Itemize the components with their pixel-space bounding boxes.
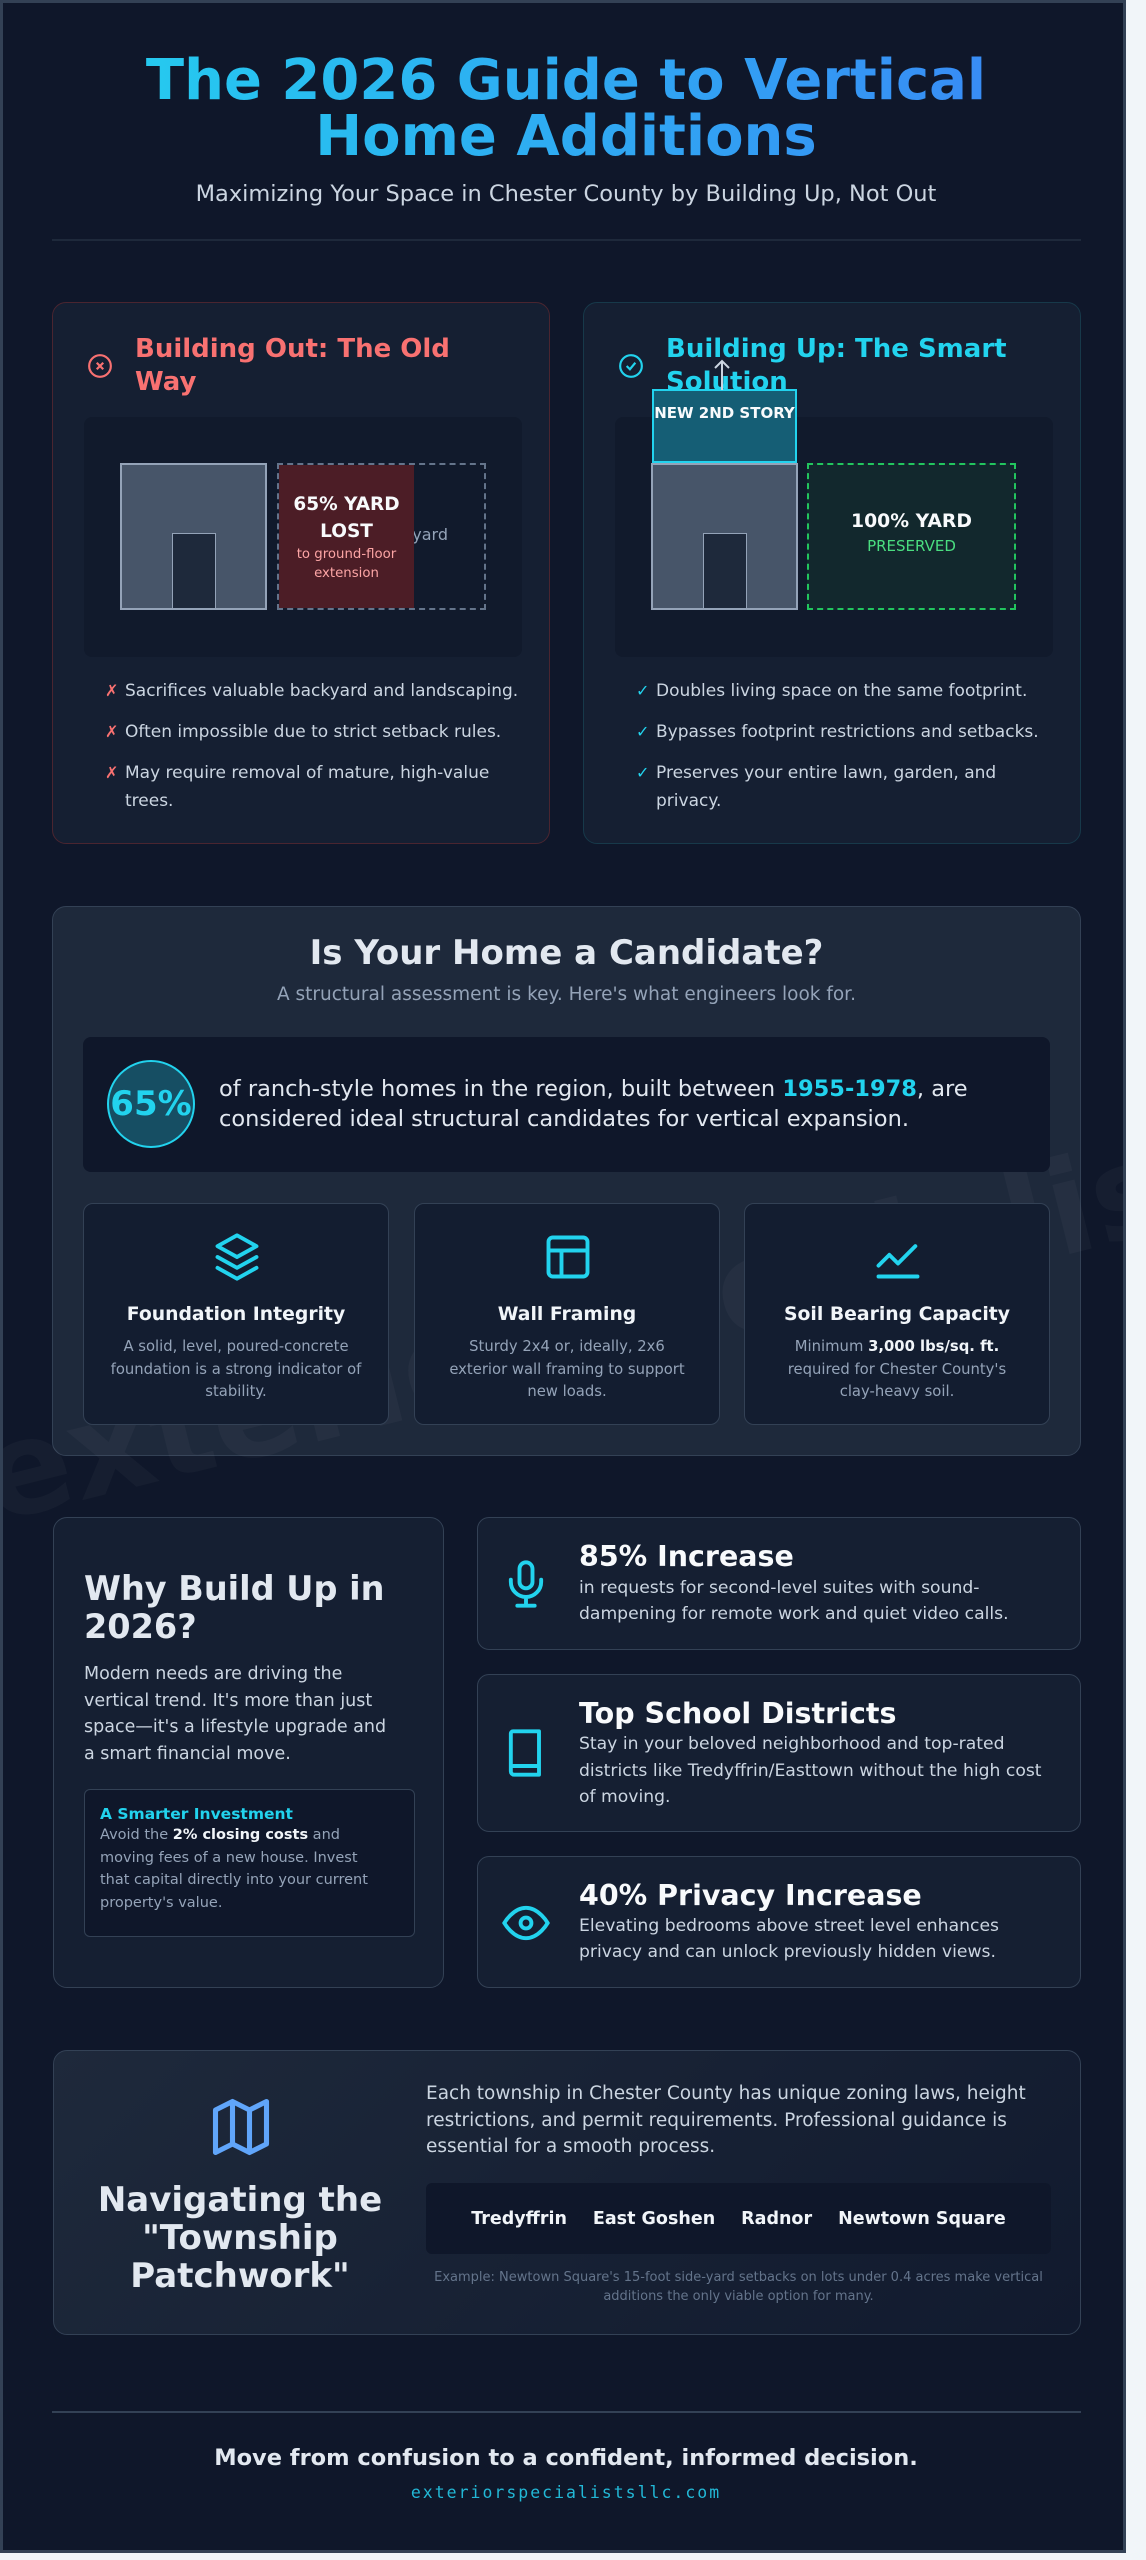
yard preserved: PRESERVED — [867, 537, 956, 555]
yard with lost portion: to ground-floor — [297, 547, 396, 562]
card: soil: Minimum 3,000 lbs/sq. ft. required for Chester County's clay-heavy soil. — [788, 1338, 1006, 1400]
township list — [426, 2183, 1051, 2254]
card: privacy — [477, 1856, 1081, 1988]
title — [3, 53, 1129, 165]
icon: eye — [502, 1906, 550, 1940]
stat text: of ranch-style homes in the region, built between 1955-1978, are considered ideal structural candidates for vertical expansion. — [219, 1076, 968, 1132]
panel: building out: ✗ — [105, 722, 118, 741]
title: Home Additions — [315, 104, 817, 169]
callout: smarter investment: Avoid the 2% closing costs and moving fees of a new house. Invest that capital directly into your current property's value. — [100, 1827, 368, 1910]
panel: why build up — [53, 1517, 444, 1988]
arrow: up — [714, 360, 730, 390]
paragraph: space—it's a lifestyle upgrade and — [84, 1717, 386, 1737]
subtitle: Maximizing Your Space in Chester County by Building Up, Not Out — [196, 181, 936, 207]
card: wall framing: Wall Framing — [498, 1304, 636, 1325]
township list: Radnor — [741, 2208, 812, 2228]
township list: Newtown Square — [838, 2208, 1006, 2228]
house — [120, 463, 267, 610]
heading: candidate: Is Your Home a Candidate? — [310, 933, 823, 973]
yard with lost portion: 65% YARD — [293, 494, 400, 515]
panel: building out: Often impossible due to strict setback rules. — [125, 722, 501, 742]
yard with lost portion: Backyard — [374, 525, 448, 544]
panel: building out: ✗ — [105, 763, 118, 782]
stat box: 65% — [83, 1037, 1050, 1172]
house — [651, 463, 798, 610]
yard with lost portion — [277, 463, 486, 610]
subheading: A structural assessment is key. Here's what engineers look for. — [277, 984, 856, 1005]
yard with lost portion: LOST — [320, 521, 373, 542]
card: foundation: Foundation Integrity — [127, 1304, 345, 1325]
township list: Tredyffrin — [471, 2208, 567, 2228]
heading: building out: Building Out: The Old Way — [135, 334, 450, 397]
title: The 2026 Guide to Vertical — [146, 48, 986, 113]
icon: circle check — [619, 354, 643, 378]
example note: Example: Newtown Square's 15-foot side-yard setbacks on lots under 0.4 acres make vertical additions the only viable option for many. — [434, 2270, 1043, 2304]
panel: township patchwork — [53, 2050, 1081, 2335]
icon: map — [212, 2098, 270, 2156]
footer url: exteriorspecialistsllc.com — [411, 2483, 721, 2502]
callout: smarter investment: A Smarter Investment — [100, 1805, 293, 1823]
diagram: second story — [615, 417, 1053, 657]
card: privacy: Elevating bedrooms above street level enhances privacy and can unlock previously hidden views. — [579, 1916, 999, 1962]
card: 85% increase — [477, 1517, 1081, 1650]
stat circle — [107, 1060, 195, 1148]
icon: circle x — [88, 354, 112, 378]
panel: building out: May require removal of mature, high-value trees. — [125, 763, 489, 811]
paragraph: a smart financial move. — [84, 1744, 291, 1764]
card: schools — [477, 1674, 1081, 1832]
yard with lost portion: extension — [314, 566, 379, 581]
new 2nd story — [652, 389, 797, 463]
footer tagline: Move from confusion to a confident, informed decision. — [214, 2445, 918, 2471]
panel: building up: ✓ — [636, 722, 649, 741]
card: privacy: 40% Privacy Increase — [579, 1879, 922, 1912]
card: schools: Top School Districts — [579, 1697, 896, 1730]
panel: candidate — [52, 906, 1081, 1456]
bullets: cons: Sacrifices valuable backyard and landscaping. — [125, 681, 518, 701]
icon: mic — [508, 1560, 544, 1608]
bullets: pros: Doubles living space on the same footprint. — [656, 681, 1027, 701]
panel: building up: ✓ — [636, 763, 649, 782]
card: wall framing — [414, 1203, 720, 1425]
panel: building up — [583, 302, 1081, 844]
card: 85% increase: 85% Increase — [579, 1540, 794, 1573]
stat circle: 65% — [110, 1084, 192, 1124]
heading: building up: Building Up: The Smart Solution — [666, 334, 1007, 397]
paragraph: vertical trend. It's more than just — [84, 1690, 372, 1710]
paragraph — [84, 1664, 386, 1764]
township list: East Goshen — [593, 2208, 715, 2228]
bullets: cons: ✗ — [105, 681, 118, 700]
panel: building up: Bypasses footprint restrictions and setbacks. — [656, 722, 1039, 742]
callout: smarter investment — [84, 1789, 415, 1937]
yard preserved: 100% YARD — [851, 511, 972, 532]
paragraph: Modern needs are driving the — [84, 1664, 342, 1684]
card: foundation — [83, 1203, 389, 1425]
panel: building up: Preserves your entire lawn, garden, and privacy. — [656, 763, 996, 811]
card: soil — [744, 1203, 1050, 1425]
card: schools: Stay in your beloved neighborhood and top-rated districts like Tredyffrin/Easttown without the high cost of moving. — [579, 1734, 1042, 1807]
card: 85% increase: in requests for second-level suites with sound-dampening for remote work and quiet video calls. — [579, 1578, 1009, 1624]
card: wall framing: Sturdy 2x4 or, ideally, 2x6 exterior wall framing to support new loads. — [449, 1338, 685, 1400]
bullets: pros: ✓ — [636, 681, 649, 700]
card: soil: Soil Bearing Capacity — [784, 1304, 1010, 1325]
diagram: ground-floor extension — [84, 417, 522, 657]
card: foundation: A solid, level, poured-concrete foundation is a strong indicator of stability. — [111, 1338, 361, 1400]
yard preserved — [807, 463, 1016, 610]
text: zoning: Each township in Chester County has unique zoning laws, height restrictions, and permit requirements. Professional guidance is essential for a smooth process. — [426, 2083, 1026, 2157]
panel: building out — [52, 302, 550, 844]
new 2nd story: NEW 2ND STORY — [654, 404, 795, 422]
heading: navigating: Navigating the "Township Patchwork" — [98, 2180, 382, 2296]
icon: book — [508, 1729, 541, 1777]
heading: why: Why Build Up in 2026? — [84, 1569, 384, 1646]
